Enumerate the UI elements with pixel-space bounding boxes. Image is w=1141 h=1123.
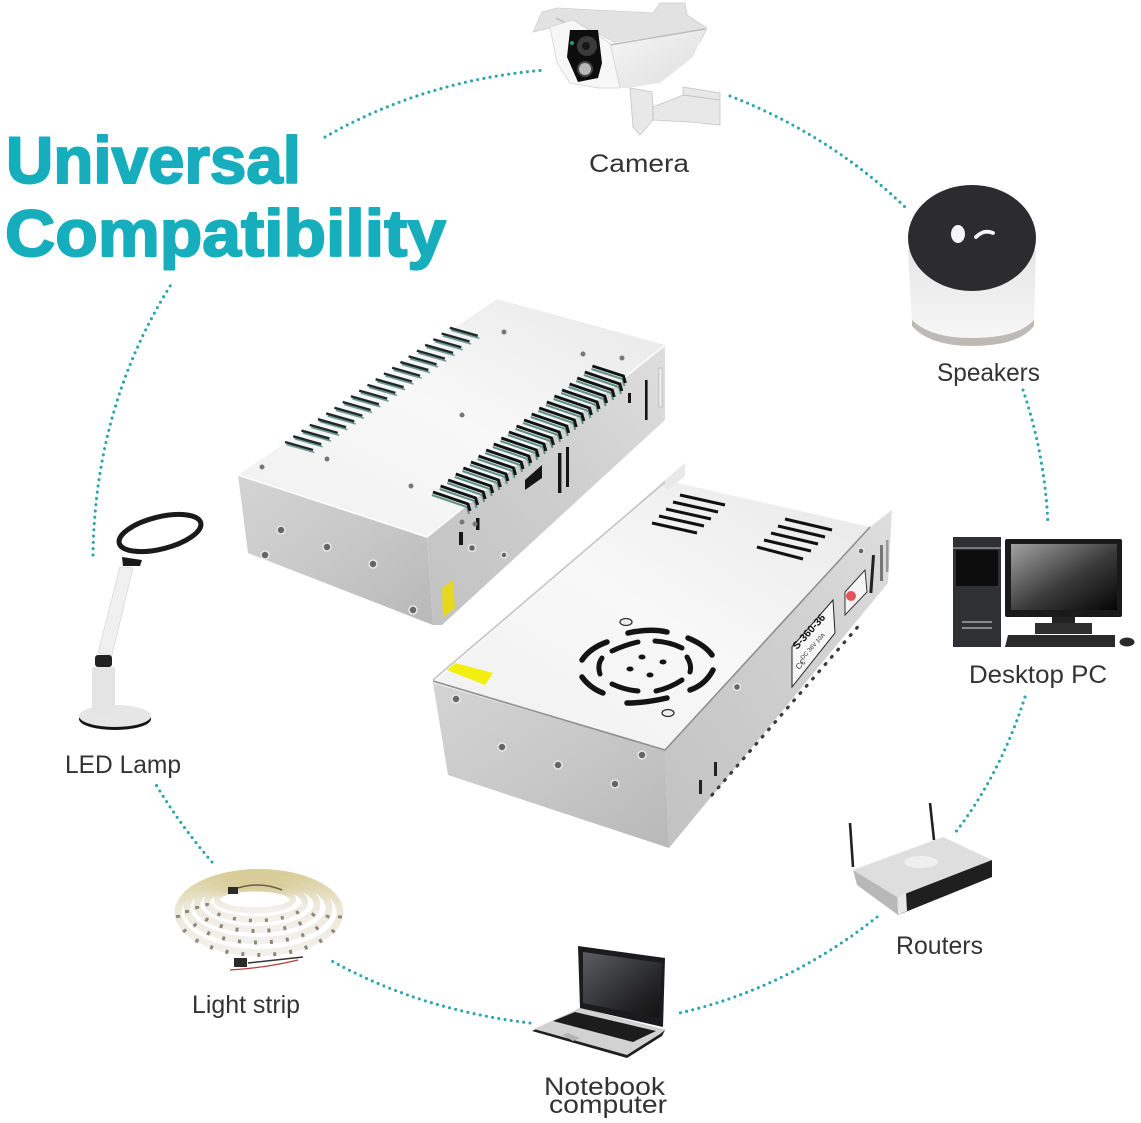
label: desktop PC: Desktop PC [969, 661, 1107, 689]
title: Compatibility [5, 196, 446, 270]
label: speakers: Speakers [937, 359, 1040, 387]
icon: desktop PC [953, 537, 1134, 647]
upper unit: screws [261, 526, 507, 614]
label: notebook computer: computer [549, 1091, 667, 1119]
icon: notebook computer [532, 946, 665, 1058]
icon: LED lamp [79, 507, 205, 730]
lower unit: side cut-outs [699, 540, 888, 794]
lower unit: red logo label [845, 570, 867, 615]
lower unit: fan grille [582, 630, 713, 703]
label: light strip: Light strip [192, 991, 300, 1019]
lower unit: yellow sticker [447, 663, 493, 685]
lower unit: model label: C€ [794, 657, 808, 671]
icon: camera [533, 3, 720, 135]
icon: light strip [178, 872, 340, 970]
label: routers: Routers [896, 932, 983, 960]
icon: speaker [908, 185, 1036, 346]
upper unit: side cut-outs [459, 380, 648, 545]
upper unit: side vent slots shadow [432, 369, 624, 514]
upper unit: side vent slots [433, 366, 625, 511]
icon: router [850, 803, 992, 915]
label: notebook computer [544, 1073, 667, 1119]
power supply: lower unit [433, 463, 892, 848]
upper unit: left vent slots [285, 328, 478, 450]
title [5, 123, 446, 270]
lower unit: model label: DC 36V 10A [800, 633, 827, 661]
label: notebook computer: Notebook [544, 1073, 666, 1101]
upper unit: left vent slots shadow [286, 330, 479, 452]
lower unit: side perforations [712, 622, 862, 795]
lower unit: model label: S-360-36 [790, 612, 828, 652]
dotted connection ring [93, 70, 1048, 1023]
lower unit: top vents [652, 495, 832, 559]
lower unit: model label [790, 600, 835, 687]
power supply: upper unit [238, 299, 665, 625]
label: LED lamp: LED Lamp [65, 751, 181, 779]
upper unit: yellow sticker [442, 580, 455, 617]
lower unit: fan screws [620, 618, 674, 716]
title: Universal [6, 123, 301, 197]
label: camera: Camera [589, 150, 689, 178]
lower unit: screws [452, 548, 864, 788]
